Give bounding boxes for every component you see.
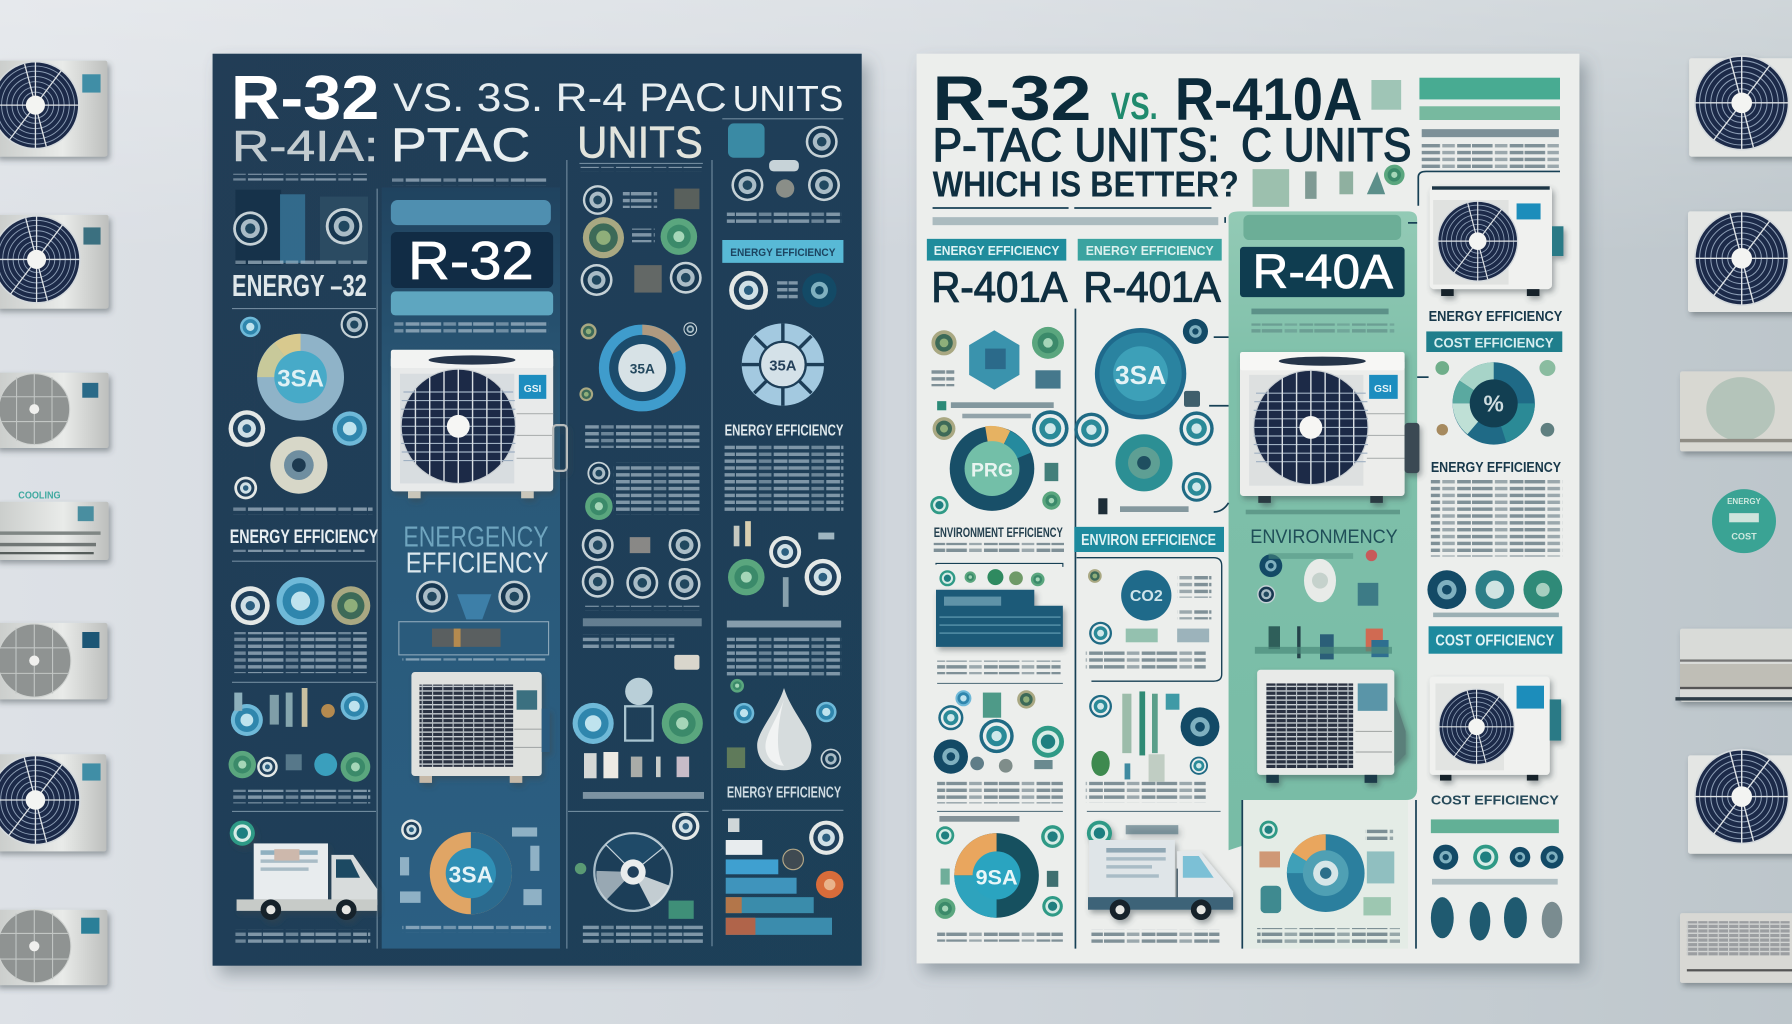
secondary AC unit R-40A	[1257, 670, 1406, 783]
teal headings and R-401A	[927, 217, 1222, 311]
icons	[729, 271, 837, 310]
title line 1: VS. 3S. R-4 PAC	[393, 76, 727, 120]
teal heading bar: ENVIRON EFFICIENCE	[1081, 532, 1216, 549]
col 4 heading: ENERGY EFFICIENCY	[727, 785, 842, 802]
blue bar	[391, 200, 551, 225]
col 2 top icons	[1074, 319, 1214, 514]
col 4 wheel chart	[742, 323, 824, 406]
caption	[934, 543, 1064, 552]
cost bar 2: COST OFFICIENCY	[1435, 633, 1555, 650]
title: VS.	[1111, 85, 1158, 127]
title line 1: R-32	[231, 64, 379, 133]
col 4 energy efficiency text	[725, 422, 844, 512]
col 1: blue unit section	[934, 543, 1064, 674]
blue panel unit	[936, 590, 1063, 647]
title: C UNITS	[1241, 119, 1411, 171]
R-32 badge: R-32	[408, 231, 534, 291]
col 3 blue and green icons	[573, 678, 704, 799]
icon: water drop	[727, 679, 841, 770]
truck illustration	[230, 821, 377, 920]
title: P-TAC UNITS:	[933, 119, 1219, 171]
caption line	[233, 550, 365, 554]
donut 3SA: 3SA	[277, 365, 324, 392]
donut 3SA	[257, 334, 344, 421]
donut bottom center: 3SA	[449, 861, 493, 887]
secondary AC unit R-32	[411, 672, 550, 783]
panel background	[917, 54, 1579, 963]
blue ring chart: 35A	[630, 362, 655, 377]
top right green blocks	[1419, 78, 1560, 168]
donut bottom left	[935, 816, 1064, 942]
col 2 top icons: 3SA	[1115, 360, 1166, 390]
donut bottom center light	[1257, 821, 1400, 944]
title line 2: UNITS	[577, 119, 703, 168]
col 2: icons and box	[399, 581, 549, 661]
col 4 energy efficiency text: ENERGY EFFICIENCY	[725, 422, 844, 439]
icon grid	[581, 185, 702, 296]
environment headings row	[934, 525, 1398, 552]
badge: teal circle: COST	[1731, 531, 1757, 541]
right col energy text: ENERGY EFFICIENCY	[1431, 460, 1561, 476]
delivery truck	[1087, 821, 1233, 920]
blue ring chart	[599, 325, 686, 411]
mint lower column	[1242, 800, 1408, 949]
heading bar left: ENERGY EFFICIENCY	[934, 244, 1060, 258]
teal heading bar	[1074, 527, 1224, 552]
col 2: R-32 header stack	[391, 178, 553, 333]
col 2: mid card: CO2	[1130, 588, 1163, 605]
col 1 second icons	[934, 683, 1064, 811]
title line 2: PTAC	[391, 119, 530, 171]
panel: R-410A light	[917, 54, 1579, 963]
bracket	[936, 563, 1063, 567]
badge: teal circle: ENERGY	[1727, 497, 1762, 506]
heading bar right	[1078, 239, 1222, 261]
teal label above unit: COOLING	[18, 490, 61, 501]
donut bottom left: 9SA	[975, 865, 1018, 890]
left heading: ENVIRONMENT EFFICIENCY	[934, 525, 1063, 540]
R-401A left: R-401A	[931, 264, 1068, 311]
heading: ENERGY EFFICIENCY	[230, 526, 378, 548]
left wall units column	[0, 61, 109, 985]
wall unit: indoor 4	[0, 502, 109, 560]
right col pie chart	[1435, 360, 1555, 445]
heading bar left	[927, 239, 1066, 261]
heading: energy -32: ENERGY –32	[232, 268, 367, 303]
light blue bar	[391, 291, 553, 315]
mint icons and caption	[1243, 215, 1401, 335]
title line 2: R-4IA:	[232, 123, 378, 171]
col 4 top section	[722, 123, 843, 310]
wall unit: fan 1	[0, 61, 107, 157]
caption	[937, 661, 1061, 674]
col 4 text block	[727, 621, 841, 677]
donut bottom center	[400, 819, 551, 933]
blue bar heading: ENERGY EFFICIENCY	[730, 247, 836, 259]
title: WHICH IS BETTER?	[933, 164, 1239, 205]
small circles	[579, 322, 697, 401]
main AC unit R-40A: GSI	[1374, 384, 1392, 395]
col 4 icons	[728, 521, 841, 607]
top-right AC unit	[1430, 186, 1563, 296]
wall unit: blurred right 3	[1680, 371, 1792, 451]
panel background	[213, 54, 862, 966]
col 2: energy efficiency heading: EFFICIENCY	[406, 548, 549, 580]
cost bar 2	[1429, 626, 1562, 654]
badge: teal circle	[1712, 489, 1776, 553]
row of icons	[939, 569, 1045, 586]
main AC unit R-40A	[1240, 352, 1419, 503]
small icon block	[233, 190, 368, 265]
title line 2	[232, 119, 703, 171]
wall unit: grey fan 7	[0, 910, 107, 985]
caption	[233, 507, 373, 514]
col 1: energy efficiency section	[230, 526, 378, 673]
col 2: energy efficiency heading	[403, 521, 549, 580]
donut col 1: PRG	[971, 460, 1013, 482]
column dividers	[232, 119, 843, 949]
icon and text	[585, 462, 699, 520]
bar chart	[726, 818, 843, 935]
col 1 top icons	[931, 327, 1069, 447]
donut col 1	[930, 426, 1061, 514]
wall unit: fan 2	[0, 215, 109, 309]
title	[933, 64, 1411, 205]
icon row 1	[231, 688, 368, 736]
right col bottom icons	[1431, 845, 1563, 941]
right col three circles	[1427, 570, 1562, 617]
R-40A badge: R-40A	[1253, 246, 1393, 299]
caption	[581, 167, 702, 171]
col 1: top section	[229, 174, 373, 514]
wall unit: grey fan 3	[0, 373, 109, 448]
main AC unit R-32: GSI	[524, 384, 542, 395]
small row	[933, 217, 1218, 225]
col 2: mid card	[1077, 558, 1222, 681]
title: R-410A	[1175, 65, 1362, 133]
right col pie chart: %	[1484, 390, 1504, 416]
right wall units column	[1675, 56, 1792, 983]
top caption	[392, 178, 546, 185]
bracket lines	[933, 171, 1560, 949]
R-401A right: R-401A	[1083, 264, 1221, 311]
wall unit: fan right 2	[1688, 211, 1792, 312]
panel: R-32 dark	[213, 54, 862, 966]
wall unit: indoor right 4	[1675, 629, 1792, 702]
icon row 2	[229, 751, 370, 782]
wall unit: fan 6	[0, 754, 106, 851]
right col AC unit 2	[1430, 677, 1561, 781]
cost efficiency heading: COST EFFICIENCY	[1431, 793, 1559, 808]
icons	[728, 123, 840, 201]
main AC unit R-32	[391, 350, 567, 498]
center heading: ENVIRONMENCY	[1250, 526, 1398, 548]
truck caption	[1091, 929, 1219, 943]
top small icons	[1253, 80, 1405, 207]
energy efficiency heading: ENERGY EFFICIENCY	[1429, 309, 1562, 325]
green bar	[1431, 819, 1559, 833]
mint center column	[1229, 211, 1417, 850]
wall unit: fan right 5	[1688, 750, 1792, 854]
heading bar right: ENERGY EFFICIENCY	[1086, 244, 1214, 258]
col 3 wheel chart	[575, 813, 703, 945]
title: R-32	[933, 64, 1091, 134]
caption	[233, 790, 370, 803]
wall unit: grey fan 5	[0, 623, 107, 699]
col 4 wheel chart: 35A	[769, 358, 797, 374]
text block	[234, 632, 367, 673]
truck caption	[235, 929, 370, 943]
wall unit: fan right 1	[1689, 56, 1792, 157]
right col headings	[1426, 309, 1562, 352]
small icon circles	[240, 311, 368, 338]
right col energy text	[1431, 460, 1562, 557]
col 2: lower icons	[1086, 691, 1221, 811]
col 1: icons section	[229, 688, 370, 803]
center mint icons	[1257, 550, 1389, 659]
title line 1: UNITS	[733, 78, 843, 119]
title line 1	[231, 64, 843, 133]
col 2: energy efficiency heading: ENERGENCY	[403, 521, 549, 553]
center column highlight	[382, 187, 560, 949]
col 3 ring icons	[582, 529, 702, 670]
col 3 top section	[579, 167, 702, 520]
caption	[394, 321, 549, 333]
ring icons	[229, 410, 367, 499]
header text	[233, 174, 368, 181]
wall unit: louvre right 6	[1680, 913, 1792, 983]
center mint caption	[1255, 647, 1392, 654]
text block	[585, 425, 699, 448]
text	[727, 210, 841, 225]
three icons	[231, 577, 370, 625]
mint caption band	[1246, 510, 1400, 514]
cost bar: COST EFFICIENCY	[1434, 335, 1554, 350]
blue bar heading	[722, 240, 843, 263]
